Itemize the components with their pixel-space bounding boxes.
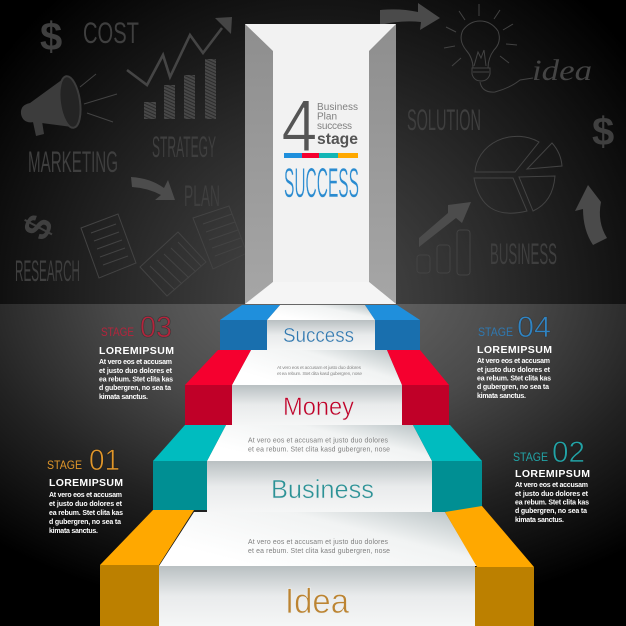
- stage label: STAGE: [513, 451, 548, 464]
- step 3: money: [185, 350, 449, 425]
- callout: stage 02: [513, 436, 590, 524]
- icon: dollar sign right: $: [592, 110, 614, 154]
- riser: [159, 566, 475, 626]
- body text: kimata sanctus.: [515, 517, 564, 524]
- door back wall: [245, 24, 396, 304]
- body text: ea rebum. Stet clita kas: [49, 510, 123, 517]
- stage label: STAGE: [478, 326, 513, 339]
- doodle word: marketing: MARKETING: [28, 146, 118, 179]
- riser: [267, 320, 375, 350]
- body text: d gubergren, no sea ta: [99, 385, 171, 392]
- body text: ea rebum. Stet clita kas: [99, 376, 173, 384]
- icon: growth arrow: [419, 202, 471, 247]
- icon: curved arrow: [131, 177, 175, 200]
- body text: et justo duo dolores et: [99, 368, 173, 375]
- tread text: et ea rebum. Stet clita kasd gubergren, nose: [277, 371, 362, 377]
- riser: [232, 385, 402, 425]
- doodles: left side: [15, 15, 247, 296]
- doodles: left side: STRATEGY: [152, 131, 216, 164]
- body text: d gubergren, no sea ta: [477, 384, 549, 391]
- tread text: [248, 539, 390, 555]
- doodles: left side: RESEARCH: [15, 255, 80, 288]
- door right wall: [369, 24, 396, 304]
- body text: ea rebum. Stet clita kas: [477, 376, 551, 382]
- colour bar: [284, 153, 358, 158]
- orange right block: [445, 506, 534, 567]
- tread text: et ea rebum. Stet clita kasd gubergren, nose: [248, 446, 390, 454]
- body text: [99, 359, 173, 401]
- icon: up arrow: [575, 185, 607, 245]
- orange left block: [100, 510, 194, 565]
- door floor: [247, 282, 396, 304]
- body text: d gubergren, no sea ta: [515, 508, 587, 515]
- body text: et justo duo dolores et: [49, 501, 123, 508]
- big numeral 4: 4: [282, 85, 317, 167]
- stage number: 03: [140, 311, 172, 344]
- icon: megaphone: [21, 74, 117, 136]
- icon: outlined bars: [417, 230, 470, 275]
- body text: kimata sanctus.: [99, 394, 148, 401]
- label: Money: [283, 393, 354, 421]
- chart: pie doodle: [474, 136, 562, 213]
- body text: At vero eos et accusam: [49, 492, 122, 499]
- label: Idea: [285, 582, 349, 621]
- heading: LOREMIPSUM: [49, 477, 123, 489]
- lower floor background: [0, 304, 626, 626]
- body text: At vero eos et accusam: [477, 358, 550, 365]
- tread text: At vero eos et accusam et justo duo dolores: [248, 438, 389, 444]
- doodle word: idea: idea: [532, 54, 592, 87]
- subtitle: [317, 102, 358, 132]
- teal right block: [413, 425, 482, 461]
- upper wall background: [0, 0, 626, 304]
- body text: et justo duo dolores et: [477, 367, 551, 374]
- label: Success: [283, 325, 354, 347]
- stage word: stage: [317, 131, 358, 148]
- tread text: At vero eos et accusam et justo duo dolores: [277, 365, 362, 371]
- stage label: STAGE: [101, 326, 134, 339]
- subtitle: Plan: [317, 112, 337, 122]
- step 1: idea: [100, 506, 534, 626]
- callout: stage 03: [99, 311, 174, 401]
- stage number: 04: [517, 311, 551, 344]
- callout: stage 04: [477, 311, 552, 400]
- icon: light bulb with wire: [444, 4, 533, 92]
- stage number: 01: [89, 444, 120, 477]
- red right block: [387, 350, 449, 385]
- teal left block: [153, 425, 226, 461]
- body text: [49, 492, 123, 535]
- stage label: STAGE: [47, 459, 82, 472]
- subtitle: success: [317, 121, 352, 132]
- body text: kimata sanctus.: [477, 393, 526, 400]
- subtitle: Business: [317, 102, 358, 113]
- tread text: [248, 438, 390, 454]
- body text: d gubergren, no sea ta: [49, 519, 121, 526]
- blue right block: [365, 305, 420, 320]
- door left wall: [245, 24, 273, 304]
- tread: [207, 425, 432, 461]
- icon: dollar sign top left: $: [40, 15, 62, 59]
- step 2: business: [153, 425, 482, 512]
- chart: hatched bars with rising arrow: [127, 17, 232, 119]
- label: Business: [271, 474, 374, 504]
- body text: At vero eos et accusam: [515, 482, 588, 489]
- door title block: [282, 85, 359, 206]
- body text: kimata sanctus.: [49, 528, 98, 535]
- tread text: [277, 365, 362, 377]
- step 4: success: [220, 305, 420, 350]
- heading: LOREMIPSUM: [99, 345, 174, 357]
- body text: [515, 482, 589, 524]
- tread: [232, 350, 402, 385]
- blue left block: [220, 305, 280, 320]
- doodle word: cost: COST: [83, 17, 139, 50]
- icon: documents: [81, 206, 247, 296]
- body text: ea rebum. Stet clita kas: [515, 500, 589, 506]
- stage number: 02: [552, 436, 585, 469]
- tread: [159, 512, 477, 566]
- doodles: left side: PLAN: [184, 180, 220, 213]
- infographic: four stage staircase to success: SUCCESS: [284, 159, 359, 206]
- tread: [267, 305, 375, 320]
- icon: top arrow: [380, 3, 440, 30]
- icon: rotated dollar sign: $: [15, 208, 62, 247]
- callout: stage 01: [47, 444, 123, 535]
- heading: LOREMIPSUM: [477, 344, 552, 356]
- body text: et justo duo dolores et: [515, 491, 589, 498]
- riser: [207, 461, 432, 512]
- heading: LOREMIPSUM: [515, 468, 590, 480]
- doodles: right side: [380, 3, 614, 275]
- tread text: et ea rebum. Stet clita kasd gubergren, nose: [248, 548, 390, 555]
- doodles: right side: SOLUTION: [407, 104, 481, 137]
- body text: [477, 358, 551, 400]
- red left block: [185, 350, 251, 385]
- door frame: [245, 24, 396, 304]
- tread text: At vero eos et accusam et justo duo dolores: [248, 539, 389, 546]
- body text: At vero eos et accusam: [99, 359, 172, 366]
